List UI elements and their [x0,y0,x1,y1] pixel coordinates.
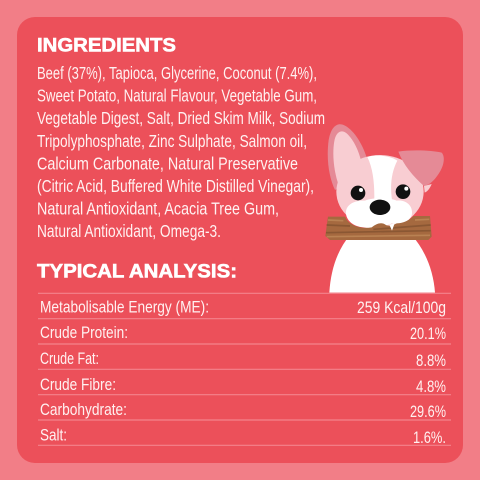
table: typical analysis: Crude Protein: [40,324,128,342]
table: typical analysis: 1.6%. [413,429,446,447]
table: typical analysis: 20.1% [410,325,446,343]
text block: ingredients list: Sweet Potato, Natural Flavour, Vegetable Gum, [37,86,317,106]
table: typical analysis: 8.8% [416,352,446,370]
tooth [389,223,395,231]
text block: ingredients list: Beef (37%), Tapioca, Glycerine, Coconut (7.4%), [37,63,317,83]
icon: dog holding a treat [325,124,444,293]
table: typical analysis: Carbohydrate: [40,401,127,419]
muzzle [346,198,412,228]
text block: ingredients list: (Citric Acid, Buffered White Distilled Vinegar), [37,176,314,196]
text block: ingredients list: Calcium Carbonate, Natural Preservative [37,153,298,173]
table: typical analysis: Crude Fat: [40,350,99,368]
dog body [329,235,435,293]
text block: ingredients list: Tripolyphosphate, Zinc Sulphate, Salmon oil, [37,131,307,151]
table: typical analysis: Metabolisable Energy (ME): [40,299,209,317]
heading: ingredients: INGREDIENTS [37,36,176,56]
heading: typical analysis: TYPICAL ANALYSIS: [37,262,237,282]
table: typical analysis: Salt: [40,427,67,445]
text block: ingredients list [37,63,325,241]
head [336,155,424,228]
text block: ingredients list: Natural Antioxidant, Omega-3. [37,221,221,241]
table: typical analysis: 259 Kcal/100g [357,299,446,317]
table: typical analysis: 4.8% [416,378,446,396]
near ear [328,124,367,190]
text block: ingredients list: Natural Antioxidant, Acacia Tree Gum, [37,199,279,219]
far ear [398,150,444,186]
table: typical analysis: 29.6% [410,403,446,421]
table: typical analysis [38,293,451,447]
nose [370,200,390,215]
text block: ingredients list: Vegetable Digest, Salt, Dried Skim Milk, Sodium [37,108,325,128]
treat [325,216,432,240]
eyes [351,184,410,200]
table: typical analysis: Crude Fibre: [40,376,116,394]
